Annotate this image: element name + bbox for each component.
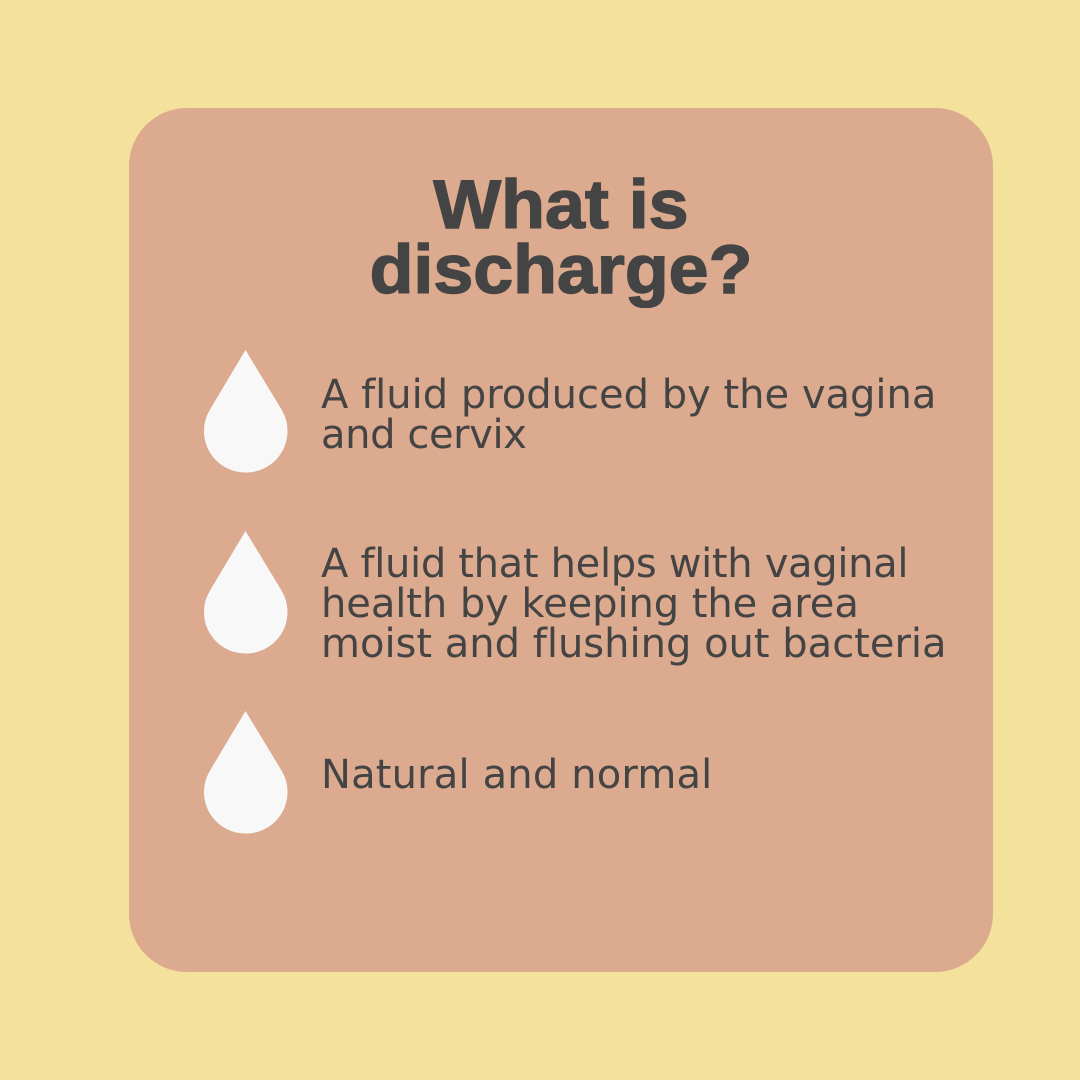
text: item 1: and cervix bbox=[321, 412, 526, 458]
text: item 2: moist and flushing out bacteria bbox=[321, 621, 947, 667]
text: item 2: A fluid that helps with vaginal bbox=[321, 541, 908, 587]
icon: water drop 1 bbox=[204, 350, 288, 472]
text: item 1: A fluid produced by the vagina bbox=[321, 372, 936, 418]
title: discharge? bbox=[370, 231, 752, 308]
text: item 1 bbox=[321, 372, 936, 458]
panel: card bbox=[129, 108, 993, 972]
icon: water drop 3 bbox=[204, 711, 288, 834]
icon: water drop 2 bbox=[204, 531, 288, 654]
text: item 2: health by keeping the area bbox=[321, 581, 859, 627]
text: item 3: Natural and normal bbox=[321, 752, 712, 798]
text: item 2 bbox=[321, 541, 947, 667]
title bbox=[370, 166, 752, 308]
title: What is bbox=[433, 166, 689, 243]
